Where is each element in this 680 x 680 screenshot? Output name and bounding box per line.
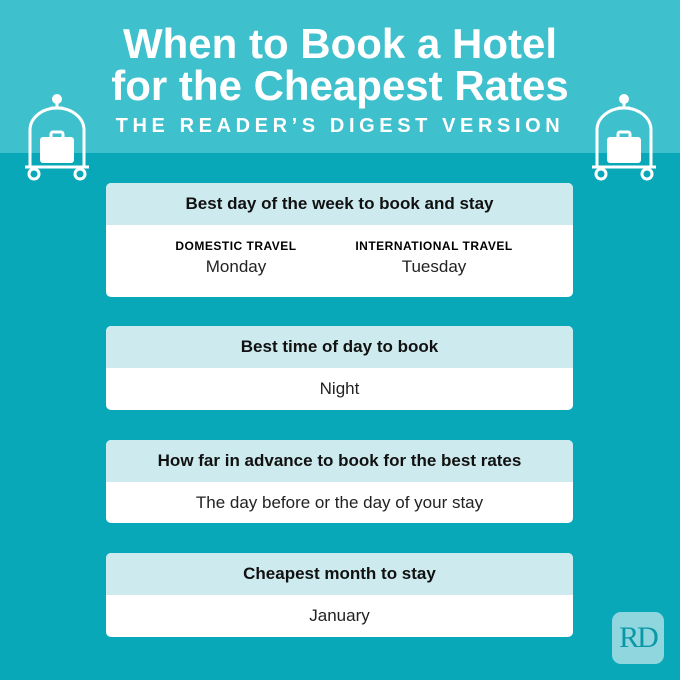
panel: best day: Tuesday bbox=[402, 257, 466, 276]
panel: cheapest month: January bbox=[309, 606, 370, 625]
panel: best day: INTERNATIONAL TRAVEL bbox=[355, 239, 513, 253]
panel: best day: DOMESTIC TRAVEL bbox=[175, 239, 297, 253]
title: When to Book a Hotel bbox=[123, 20, 557, 67]
title bbox=[111, 20, 569, 109]
logo: RD: RD bbox=[619, 621, 657, 654]
panel: best day: Best day of the week to book and stay bbox=[186, 194, 493, 213]
panel: advance: The day before or the day of your stay bbox=[196, 493, 483, 512]
subtitle: THE READER’S DIGEST VERSION bbox=[116, 115, 564, 137]
panel: time of day: Night bbox=[320, 379, 359, 398]
panel: advance: How far in advance to book for the best rates bbox=[158, 451, 521, 470]
icon: luggage cart right bbox=[592, 94, 656, 180]
logo: RD bbox=[612, 612, 664, 664]
panel: advance bbox=[106, 440, 573, 523]
title: for the Cheapest Rates bbox=[111, 62, 569, 109]
panel: time of day: Best time of day to book bbox=[241, 337, 438, 356]
panel: best day: Monday bbox=[206, 257, 266, 276]
panel: cheapest month: Cheapest month to stay bbox=[243, 564, 436, 583]
panel: best day bbox=[106, 183, 573, 297]
icon: luggage cart left bbox=[25, 94, 89, 180]
panel: cheapest month bbox=[106, 553, 573, 637]
panel: time of day bbox=[106, 326, 573, 410]
